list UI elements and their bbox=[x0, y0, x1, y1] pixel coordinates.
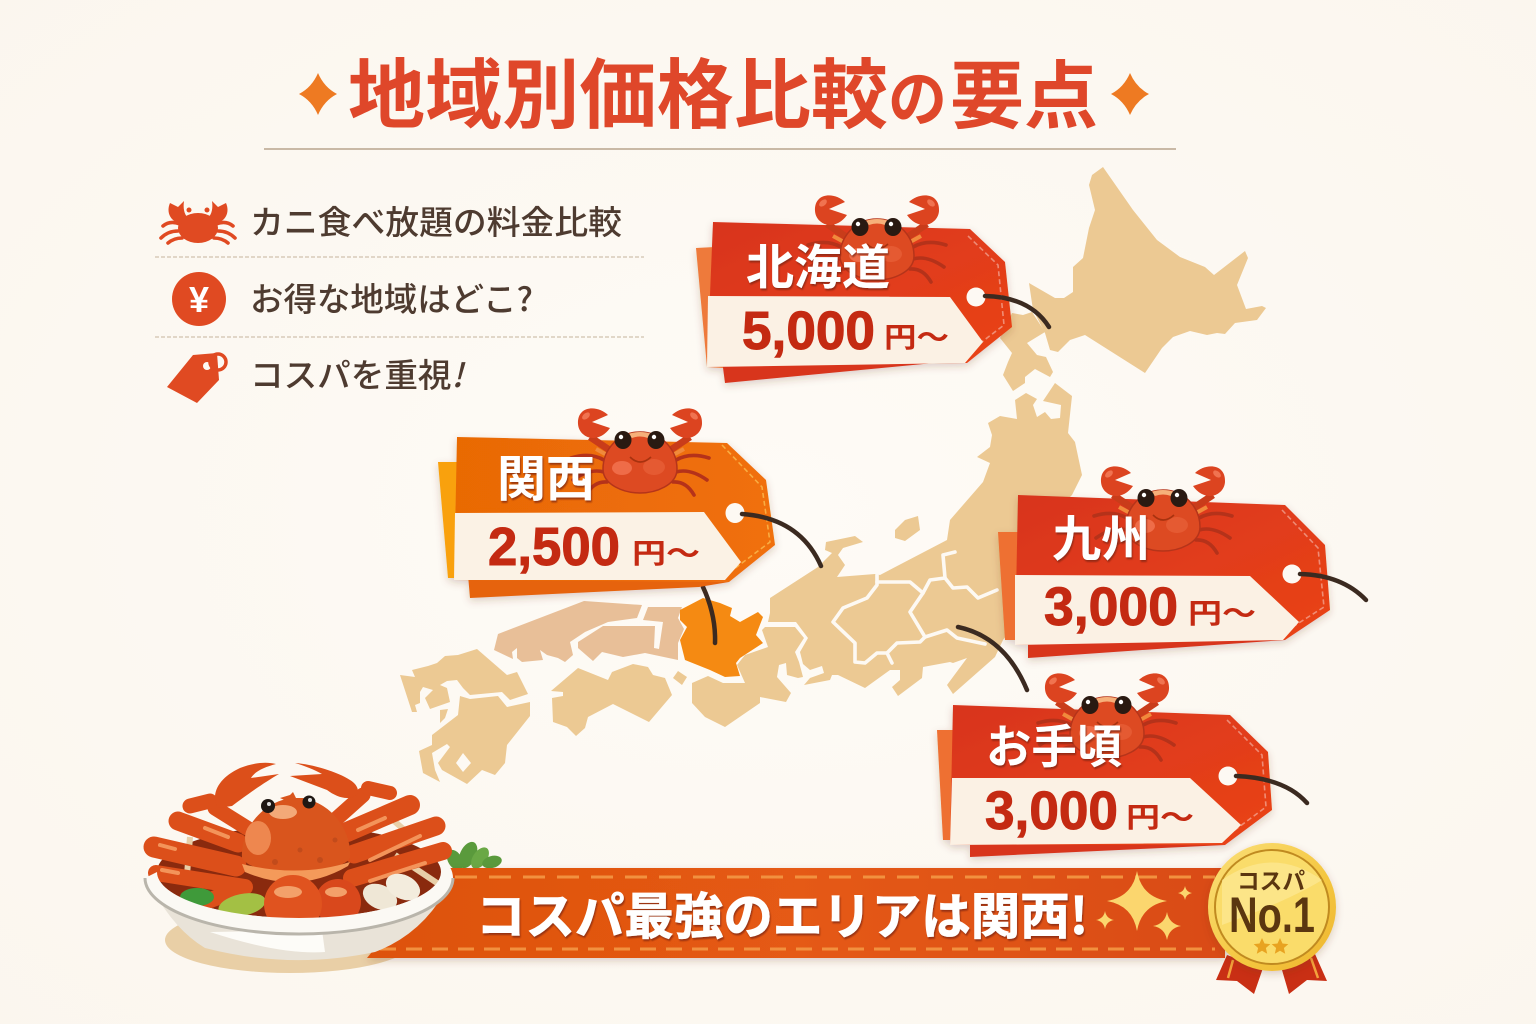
list item 1: カニ食べ放題の料金比較 bbox=[250, 196, 622, 244]
map: Kansai highlight bbox=[680, 598, 763, 677]
medal number: No.1 bbox=[1229, 887, 1315, 943]
price: 2,500 bbox=[488, 517, 620, 577]
map: Shikoku bbox=[551, 664, 672, 736]
map: Kii region bbox=[692, 627, 804, 727]
map: Chugoku north bbox=[494, 601, 642, 662]
list item 3: コスパを重視! bbox=[250, 349, 466, 397]
price: 円〜 bbox=[1126, 796, 1194, 836]
price tag: Hokkaido bbox=[696, 195, 1012, 383]
tag hole bbox=[1282, 564, 1302, 584]
medal ribbons bbox=[1216, 954, 1327, 994]
crab legs bbox=[154, 788, 443, 902]
connector: Hokkaido bbox=[985, 296, 1049, 327]
title text: の bbox=[888, 49, 947, 139]
title text: 地域別価格比較 bbox=[348, 34, 888, 144]
crab mascot bbox=[1094, 466, 1232, 553]
bottom banner bbox=[165, 868, 1225, 973]
title text: 要点 bbox=[950, 37, 1098, 144]
tag body bbox=[696, 222, 1012, 383]
icon: left diamond bbox=[299, 73, 337, 115]
region name: 九州 bbox=[1052, 500, 1150, 571]
medal label: コスパ bbox=[1237, 862, 1305, 896]
tag hole bbox=[966, 288, 986, 306]
price tag: Kyushu bbox=[998, 466, 1330, 658]
price tag: Kansai bbox=[438, 408, 775, 598]
plate shadow bbox=[165, 907, 415, 973]
price: 3,000 bbox=[1044, 577, 1178, 637]
price bbox=[488, 517, 700, 577]
icon: yen coin bbox=[172, 272, 226, 326]
price bbox=[1044, 577, 1256, 637]
crab eyes bbox=[261, 796, 316, 813]
tag hole bbox=[1218, 766, 1238, 786]
icon: yen coin: ¥ bbox=[189, 279, 209, 320]
price: 3,000 bbox=[985, 781, 1118, 841]
price: 円〜 bbox=[884, 316, 949, 356]
connector: budget area bbox=[1236, 776, 1307, 803]
tag hole bbox=[726, 503, 744, 523]
banner message: コスパ最強のエリアは関西! bbox=[476, 877, 1088, 949]
crab mascot bbox=[571, 408, 709, 495]
banner ribbon bbox=[367, 868, 1225, 958]
crab claws bbox=[215, 763, 358, 808]
tag body bbox=[438, 437, 775, 598]
map: Kyushu north bbox=[400, 649, 528, 712]
plate front rim bbox=[145, 872, 453, 934]
price bbox=[742, 301, 949, 361]
price: 円〜 bbox=[632, 532, 700, 572]
illustration: crab on a plate bbox=[145, 763, 453, 960]
medal stars bbox=[1254, 938, 1288, 954]
list item 2: お得な地域はどこ? bbox=[250, 273, 533, 321]
tag body bbox=[998, 495, 1330, 658]
price: 5,000 bbox=[742, 301, 875, 361]
connector: central Honshu bbox=[958, 627, 1027, 690]
plate bbox=[153, 890, 445, 960]
leaf garnish bbox=[443, 839, 503, 873]
side dishes bbox=[180, 869, 424, 933]
map: northern Tohoku tip bbox=[1000, 312, 1053, 391]
medal disc bbox=[1208, 843, 1336, 971]
map: regional boundaries bbox=[833, 552, 997, 663]
region name: 関西 bbox=[497, 440, 595, 511]
region name: 北海道 bbox=[746, 228, 890, 298]
tag body bbox=[937, 705, 1272, 857]
icon: sparkles bbox=[1096, 871, 1192, 940]
map: Awaji bbox=[673, 671, 687, 685]
tan bones bbox=[187, 820, 440, 885]
checklist panel bbox=[155, 196, 644, 403]
map: Chugoku south bbox=[578, 607, 684, 661]
connector: Kansai bbox=[742, 514, 821, 566]
region name: お手頃 bbox=[986, 711, 1122, 777]
icon: right diamond bbox=[1111, 73, 1149, 115]
crab mascot bbox=[808, 195, 946, 282]
map: Hokkaido bbox=[1029, 167, 1266, 373]
connector: Kansai to map bbox=[703, 587, 715, 643]
icon: crab bbox=[161, 201, 235, 243]
icon: price tag bbox=[167, 353, 226, 403]
map: Sado island bbox=[895, 516, 920, 541]
leg highlights bbox=[160, 818, 425, 881]
japan map bbox=[400, 167, 1266, 784]
price bbox=[985, 781, 1194, 841]
price tag: budget area bbox=[937, 673, 1272, 857]
medal: cost performance No.1 bbox=[1208, 843, 1336, 994]
crab shell bbox=[242, 798, 350, 873]
connector: Kyushu bbox=[1300, 574, 1366, 600]
map: Kyushu south bbox=[419, 696, 530, 784]
price: 円〜 bbox=[1188, 592, 1256, 632]
map: Honshu main body bbox=[768, 383, 1082, 696]
title bbox=[299, 34, 1149, 144]
crab mascot bbox=[1038, 673, 1176, 760]
